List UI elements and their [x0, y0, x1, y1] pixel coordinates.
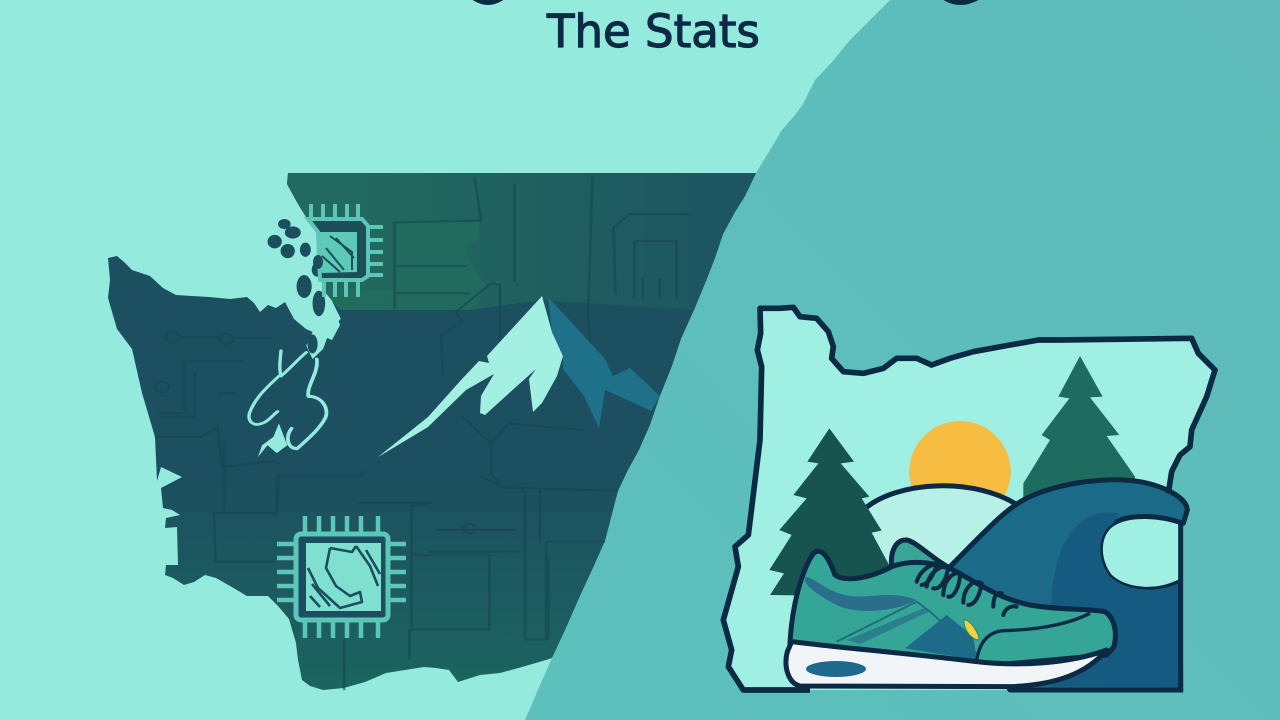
- subtitle: The Stats: [546, 5, 760, 58]
- icon: mountain snow face: [378, 296, 563, 457]
- map: San Juan islands: [268, 219, 323, 277]
- Oregon outline: [723, 307, 1215, 690]
- islands: [297, 275, 325, 353]
- shoe sole air pocket: [806, 661, 866, 677]
- map: circuit and county lines: [155, 177, 689, 690]
- icon: ocean wave: [950, 480, 1187, 690]
- map: lighter green county block: [328, 222, 485, 310]
- icon: hill: [863, 486, 1020, 590]
- shoe yellow logo: [964, 619, 979, 640]
- map: Puget Sound water: [249, 275, 341, 457]
- map: Oregon state scene: [723, 307, 1215, 690]
- icon: left pine tree: [769, 428, 890, 597]
- shoe blue stripes: [805, 577, 917, 611]
- icon: small microchip: [308, 204, 383, 297]
- shoe tongue: [891, 540, 953, 577]
- icon: large microchip: [277, 516, 406, 638]
- Oregon fill: [723, 307, 1215, 690]
- panel: darker right background with torn edge: [525, 0, 1280, 720]
- title fragments: clipped descenders from the headline: [475, 0, 976, 2]
- icon: sun: [909, 421, 1011, 522]
- map silhouette: [108, 173, 756, 690]
- shoe laces: [917, 565, 1017, 615]
- icon: right pine tree: [1023, 356, 1137, 503]
- icon: mountain shadow face: [548, 297, 660, 428]
- icon: running shoe: [786, 540, 1115, 687]
- map: Washington state: [108, 173, 756, 690]
- shoe sole: [786, 642, 1107, 687]
- map: green upper band: [287, 173, 756, 310]
- shoe upper: [790, 551, 1115, 667]
